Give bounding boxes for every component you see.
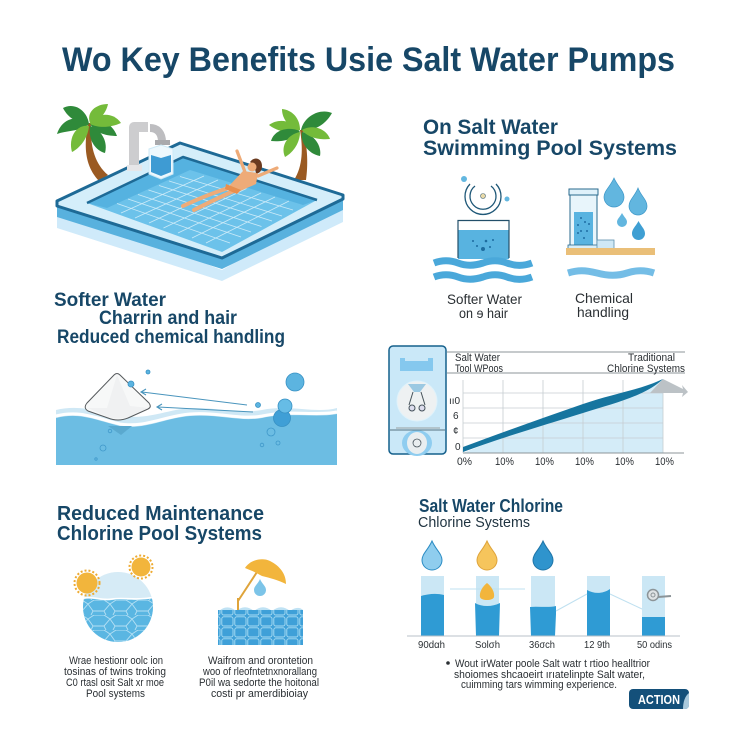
heading: salt water chlorine: Chlorine Systems bbox=[418, 514, 530, 531]
tile grid bbox=[117, 176, 293, 243]
bar labels: 36σch bbox=[529, 639, 555, 651]
icon: right palm tree bbox=[269, 109, 332, 180]
bar chart: water levels bbox=[407, 541, 680, 651]
chart labels: Tool WPoos bbox=[455, 363, 503, 375]
bar labels: 90dαh bbox=[418, 639, 445, 651]
light wave bbox=[56, 408, 337, 440]
connectors bbox=[450, 589, 642, 611]
button: action bbox=[629, 689, 689, 709]
icon: left palm tree bbox=[57, 104, 121, 181]
caption: softer water: on ɘ hair bbox=[459, 305, 508, 321]
area under curve bbox=[463, 379, 663, 453]
heading: on salt water: Swimming Pool Systems bbox=[423, 137, 677, 160]
heading: on salt water: On Salt Water bbox=[423, 116, 558, 139]
text block: summary bullet: cuimming tars wimming experience. bbox=[461, 679, 617, 691]
heading: softer water: Reduced chemical handling bbox=[57, 327, 285, 348]
illustration: pool with palms and swimmer bbox=[57, 104, 343, 281]
text block: left description: Pool systems bbox=[86, 688, 145, 700]
pool base bbox=[57, 200, 343, 281]
bubbles bbox=[95, 370, 304, 460]
heading: on salt water bbox=[423, 116, 677, 160]
text block: right description: woo of rleofntetnxnorallang bbox=[202, 666, 317, 678]
bar labels bbox=[418, 639, 672, 651]
bar labels: Solσh bbox=[475, 639, 500, 651]
chart labels bbox=[449, 352, 685, 468]
text block: left description bbox=[64, 655, 166, 700]
icon: salt pile bbox=[85, 374, 150, 435]
chart labels: 0% bbox=[457, 456, 472, 468]
chart labels: 10% bbox=[615, 456, 634, 468]
icon: softer water tank bbox=[434, 176, 532, 279]
bar labels: 50 odins bbox=[637, 639, 672, 651]
heading: softer water: Softer Water bbox=[54, 290, 167, 311]
heading: softer water: Charrin and hair bbox=[99, 308, 238, 329]
foam line bbox=[56, 412, 337, 425]
text block: left description: C0 rtasl osit Salt xr moe bbox=[66, 677, 164, 689]
text block: summary bullet bbox=[446, 658, 650, 691]
pool side wall bbox=[57, 195, 343, 269]
water back shade bbox=[87, 157, 317, 208]
grid lines bbox=[463, 380, 663, 453]
icon: salt cell box bbox=[149, 145, 173, 179]
icon: pump pipe bbox=[127, 127, 170, 171]
bar labels: 12 9th bbox=[584, 639, 610, 651]
text block: right description: P0il wa sedorte the hoitonal bbox=[199, 677, 319, 689]
heading: salt water chlorine bbox=[418, 496, 563, 531]
heading: reduced maintenance: Chlorine Pool Systems bbox=[57, 523, 262, 545]
icon: gauge bbox=[648, 590, 671, 600]
chart labels: Chlorine Systems bbox=[607, 363, 685, 375]
text block: summary bullet: Wout irWater poole Salt watr t rtioo healltrior bbox=[455, 658, 650, 670]
icon: amber droplet on bar bbox=[480, 583, 494, 600]
chart: salt water vs chlorine bbox=[389, 346, 688, 468]
text block: right description: Waifrom and orontetion bbox=[208, 655, 313, 667]
heading: reduced maintenance: Reduced Maintenance bbox=[57, 503, 264, 525]
text block: summary bullet: shoiomes shcaoeirt ırıatelinpte Salt water, bbox=[454, 669, 645, 681]
chart labels: 10% bbox=[655, 456, 674, 468]
chart labels: 10% bbox=[535, 456, 554, 468]
chart labels: ıı0 bbox=[449, 396, 461, 407]
caption: chemical handling bbox=[575, 290, 633, 320]
panel: pump diagram bbox=[389, 346, 446, 456]
water bbox=[56, 414, 337, 465]
text block: right description: costi pr amerdibioiay bbox=[211, 688, 308, 700]
text block: left description: tosinas of twins troking bbox=[64, 666, 166, 678]
chart labels: Salt Water bbox=[455, 352, 500, 364]
bars bbox=[421, 576, 665, 636]
icon: sun and water sphere bbox=[74, 556, 155, 645]
heading: softer water bbox=[54, 290, 285, 348]
chart labels: ¢ bbox=[453, 426, 459, 437]
axis bbox=[407, 635, 680, 637]
chart frame lines bbox=[447, 352, 685, 373]
chart labels: 10% bbox=[495, 456, 514, 468]
inner rim shadow bbox=[87, 157, 317, 203]
caption: chemical handling: Chemical bbox=[575, 290, 633, 306]
trend arrow bbox=[650, 379, 688, 397]
caption: softer water bbox=[447, 291, 522, 321]
arrows bbox=[141, 389, 253, 412]
caption: chemical handling: handling bbox=[577, 304, 629, 320]
chart labels: 10% bbox=[575, 456, 594, 468]
heading: reduced maintenance bbox=[57, 503, 264, 545]
illustration: salt pile in water bbox=[56, 370, 337, 465]
trend band bbox=[463, 379, 663, 452]
button: action: ACTION bbox=[638, 692, 680, 707]
text block: left description: Wrae hestionr oolc ion bbox=[69, 655, 163, 667]
chart labels: Traditional bbox=[628, 352, 675, 364]
icon: chemical column and droplets bbox=[566, 178, 655, 275]
title: Wo Key Benefits Usie Salt Water Pumps bbox=[62, 41, 675, 79]
pool rim bbox=[57, 143, 343, 258]
chart labels: 0 bbox=[455, 442, 461, 453]
droplets bbox=[422, 541, 553, 570]
icon: umbrella and tiled water bbox=[218, 559, 303, 645]
chart labels: 6 bbox=[453, 411, 459, 422]
caption: softer water: Softer Water bbox=[447, 291, 522, 307]
heading: salt water chlorine: Salt Water Chlorine bbox=[419, 496, 563, 516]
baseline bbox=[463, 452, 684, 454]
pool water bbox=[87, 157, 317, 252]
text block: right description bbox=[199, 655, 319, 700]
icon: swimmer bbox=[183, 151, 277, 210]
